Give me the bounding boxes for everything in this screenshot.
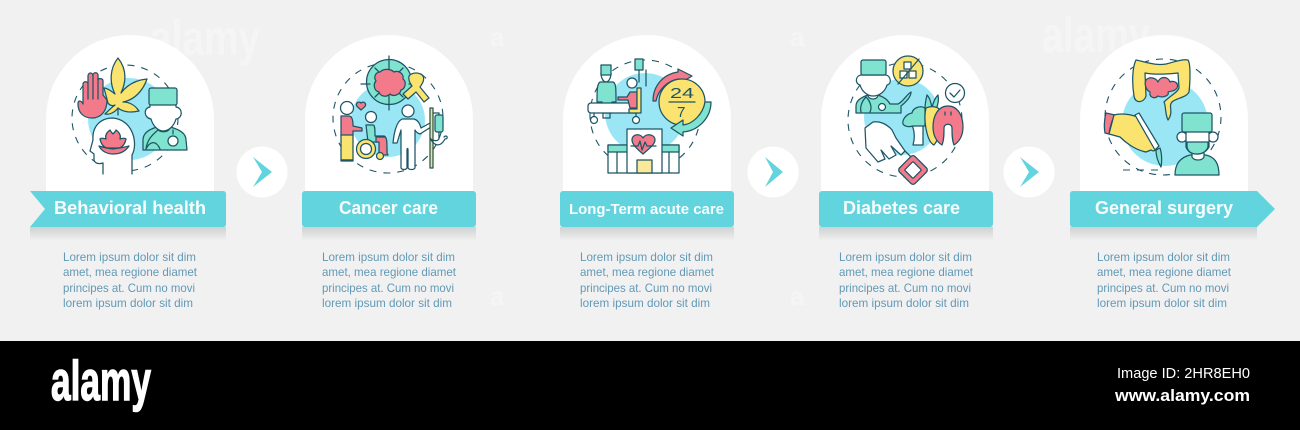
arrow button 1 (236, 146, 288, 198)
panel: diabetes care (819, 35, 993, 310)
watermarks: a (490, 281, 505, 311)
body text: lorem ipsum dolor sit dim (580, 296, 710, 310)
body text: amet, mea regione diamet (1097, 265, 1232, 279)
arch card (305, 35, 473, 195)
banner (1070, 191, 1275, 227)
body text: principes at. Cum no movi (63, 281, 195, 295)
arrow button 3 (1004, 146, 1054, 198)
watermarks: a (490, 22, 505, 52)
banner (302, 191, 476, 227)
banner shadow (1070, 227, 1257, 241)
footer bar (0, 341, 1300, 430)
heading: Cancer care (339, 198, 438, 218)
body text: Lorem ipsum dolor sit dim (322, 250, 455, 264)
body text (839, 250, 974, 310)
watermarks (150, 7, 1150, 311)
heading: Behavioral health (54, 198, 206, 218)
banner shadow (30, 227, 226, 241)
body text: principes at. Cum no movi (839, 281, 971, 295)
website: www.alamy.com (1114, 386, 1250, 405)
body text: lorem ipsum dolor sit dim (1097, 296, 1227, 310)
body text: amet, mea regione diamet (580, 265, 715, 279)
watermarks: alamy (150, 10, 260, 66)
arch card (46, 35, 214, 195)
icon: hospital bed, 24/7 clock and building (588, 59, 711, 173)
body text: lorem ipsum dolor sit dim (322, 296, 452, 310)
watermarks: a (790, 22, 805, 52)
body text: lorem ipsum dolor sit dim (63, 296, 193, 310)
arch card (821, 35, 989, 195)
body text (1097, 250, 1232, 310)
body text: Lorem ipsum dolor sit dim (1097, 250, 1230, 264)
body text: Lorem ipsum dolor sit dim (63, 250, 196, 264)
icon: doctor, sugar, healthy food, finger prick and sensor (848, 56, 964, 186)
heading: Diabetes care (843, 198, 960, 218)
arrow button 2 (748, 146, 798, 198)
icon: hospital bed, 24/7 clock and building: 24 (670, 85, 694, 102)
watermarks: a (790, 281, 805, 311)
icon: intestines, gloved hand with scalpel and surgeon (1104, 59, 1221, 175)
panel: general surgery (1070, 35, 1275, 310)
body text: Lorem ipsum dolor sit dim (580, 250, 713, 264)
arch card (563, 35, 731, 195)
banner (819, 191, 993, 227)
panel: behavioral health (30, 35, 226, 310)
banner shadow (819, 227, 993, 241)
body text: amet, mea regione diamet (63, 265, 198, 279)
body text: amet, mea regione diamet (839, 265, 974, 279)
watermarks: alamy (1042, 7, 1150, 63)
body text: Lorem ipsum dolor sit dim (839, 250, 972, 264)
banner shadow (302, 227, 476, 241)
icon: hand, leaf, lotus and doctor (72, 58, 187, 174)
heading: Long-Term acute care (569, 201, 724, 218)
banner (560, 191, 734, 227)
background (0, 0, 1300, 341)
panel: long-term acute care (560, 35, 734, 310)
body text: principes at. Cum no movi (322, 281, 454, 295)
banner shadow (560, 227, 734, 241)
body text: amet, mea regione diamet (322, 265, 457, 279)
alamy logo: alamy (51, 349, 151, 412)
body text: principes at. Cum no movi (580, 281, 712, 295)
body text (322, 250, 457, 310)
icon: hospital bed, 24/7 clock and building: 7 (677, 104, 685, 121)
body text: lorem ipsum dolor sit dim (839, 296, 969, 310)
body text: principes at. Cum no movi (1097, 281, 1229, 295)
arch card (1080, 35, 1248, 195)
body text (63, 250, 198, 310)
body text (580, 250, 715, 310)
image id: Image ID: 2HR8EH0 (1117, 365, 1250, 382)
icon: tumour target, ribbon, caregiver and patient (333, 56, 447, 173)
panel: cancer care (302, 35, 476, 310)
heading: General surgery (1095, 198, 1233, 218)
banner (30, 191, 226, 227)
